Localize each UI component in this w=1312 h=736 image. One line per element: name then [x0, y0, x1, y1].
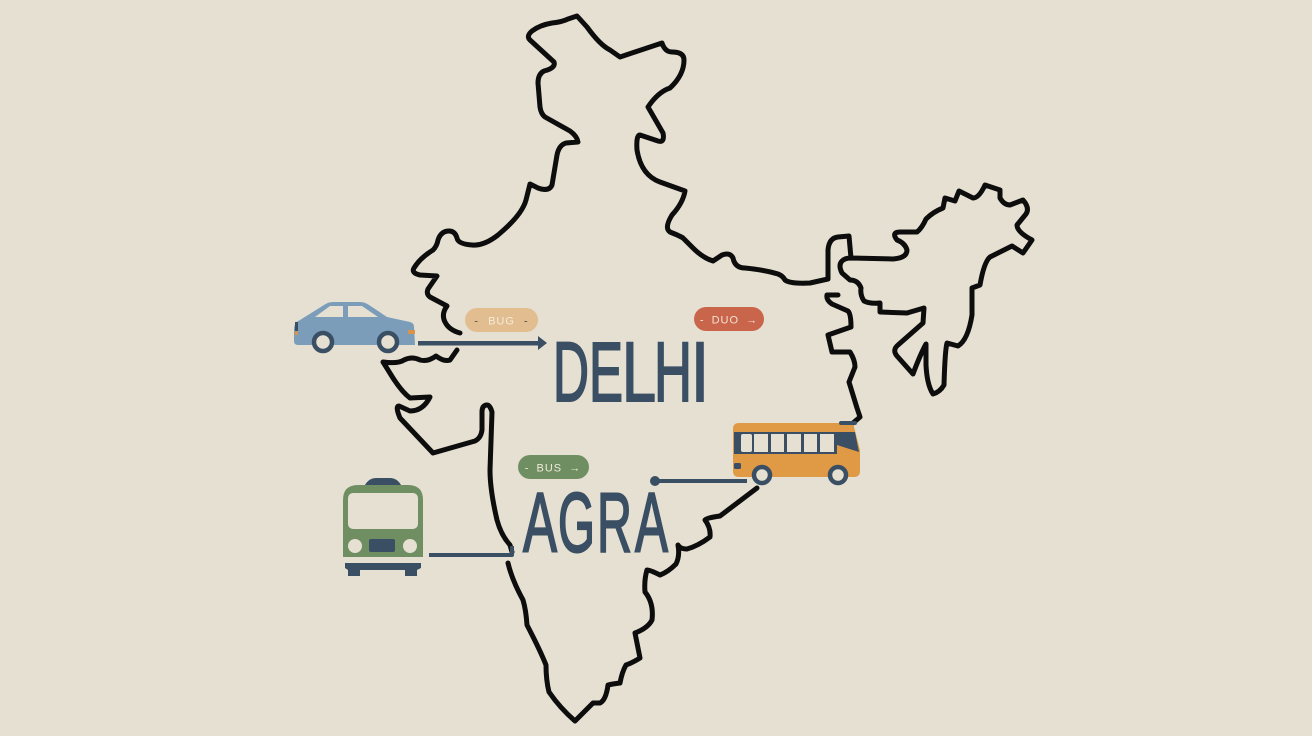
- map: India outline: [383, 16, 1032, 721]
- connector: orange bus to Agra: [650, 476, 747, 486]
- heading: DELHI: L: [622, 325, 656, 419]
- label pill: BUS: - BUS →: [525, 462, 581, 474]
- icon: blue car: [294, 302, 415, 351]
- label pill: BUS: [518, 455, 589, 479]
- heading: AGRA: A: [635, 476, 668, 570]
- heading: DELHI: D: [553, 325, 589, 419]
- label pill: BUG: [465, 308, 538, 332]
- heading: AGRA: R: [597, 476, 632, 570]
- label pill: DUO: - DUO →: [700, 314, 758, 326]
- icon: orange bus: [733, 421, 860, 483]
- connector: green bus to map: [429, 546, 512, 555]
- heading: DELHI: [553, 325, 709, 419]
- heading: DELHI: E: [589, 325, 623, 419]
- heading: AGRA: G: [558, 476, 595, 570]
- heading: DELHI: H: [654, 325, 692, 419]
- label pill: BUG: - BUG -: [474, 316, 529, 328]
- heading: AGRA: A: [523, 476, 557, 570]
- arrow: car to Delhi: [418, 336, 547, 350]
- label pill: DUO: [694, 307, 764, 331]
- heading: DELHI: I: [691, 325, 709, 419]
- heading: AGRA: [523, 476, 668, 570]
- icon: green bus: [343, 478, 423, 576]
